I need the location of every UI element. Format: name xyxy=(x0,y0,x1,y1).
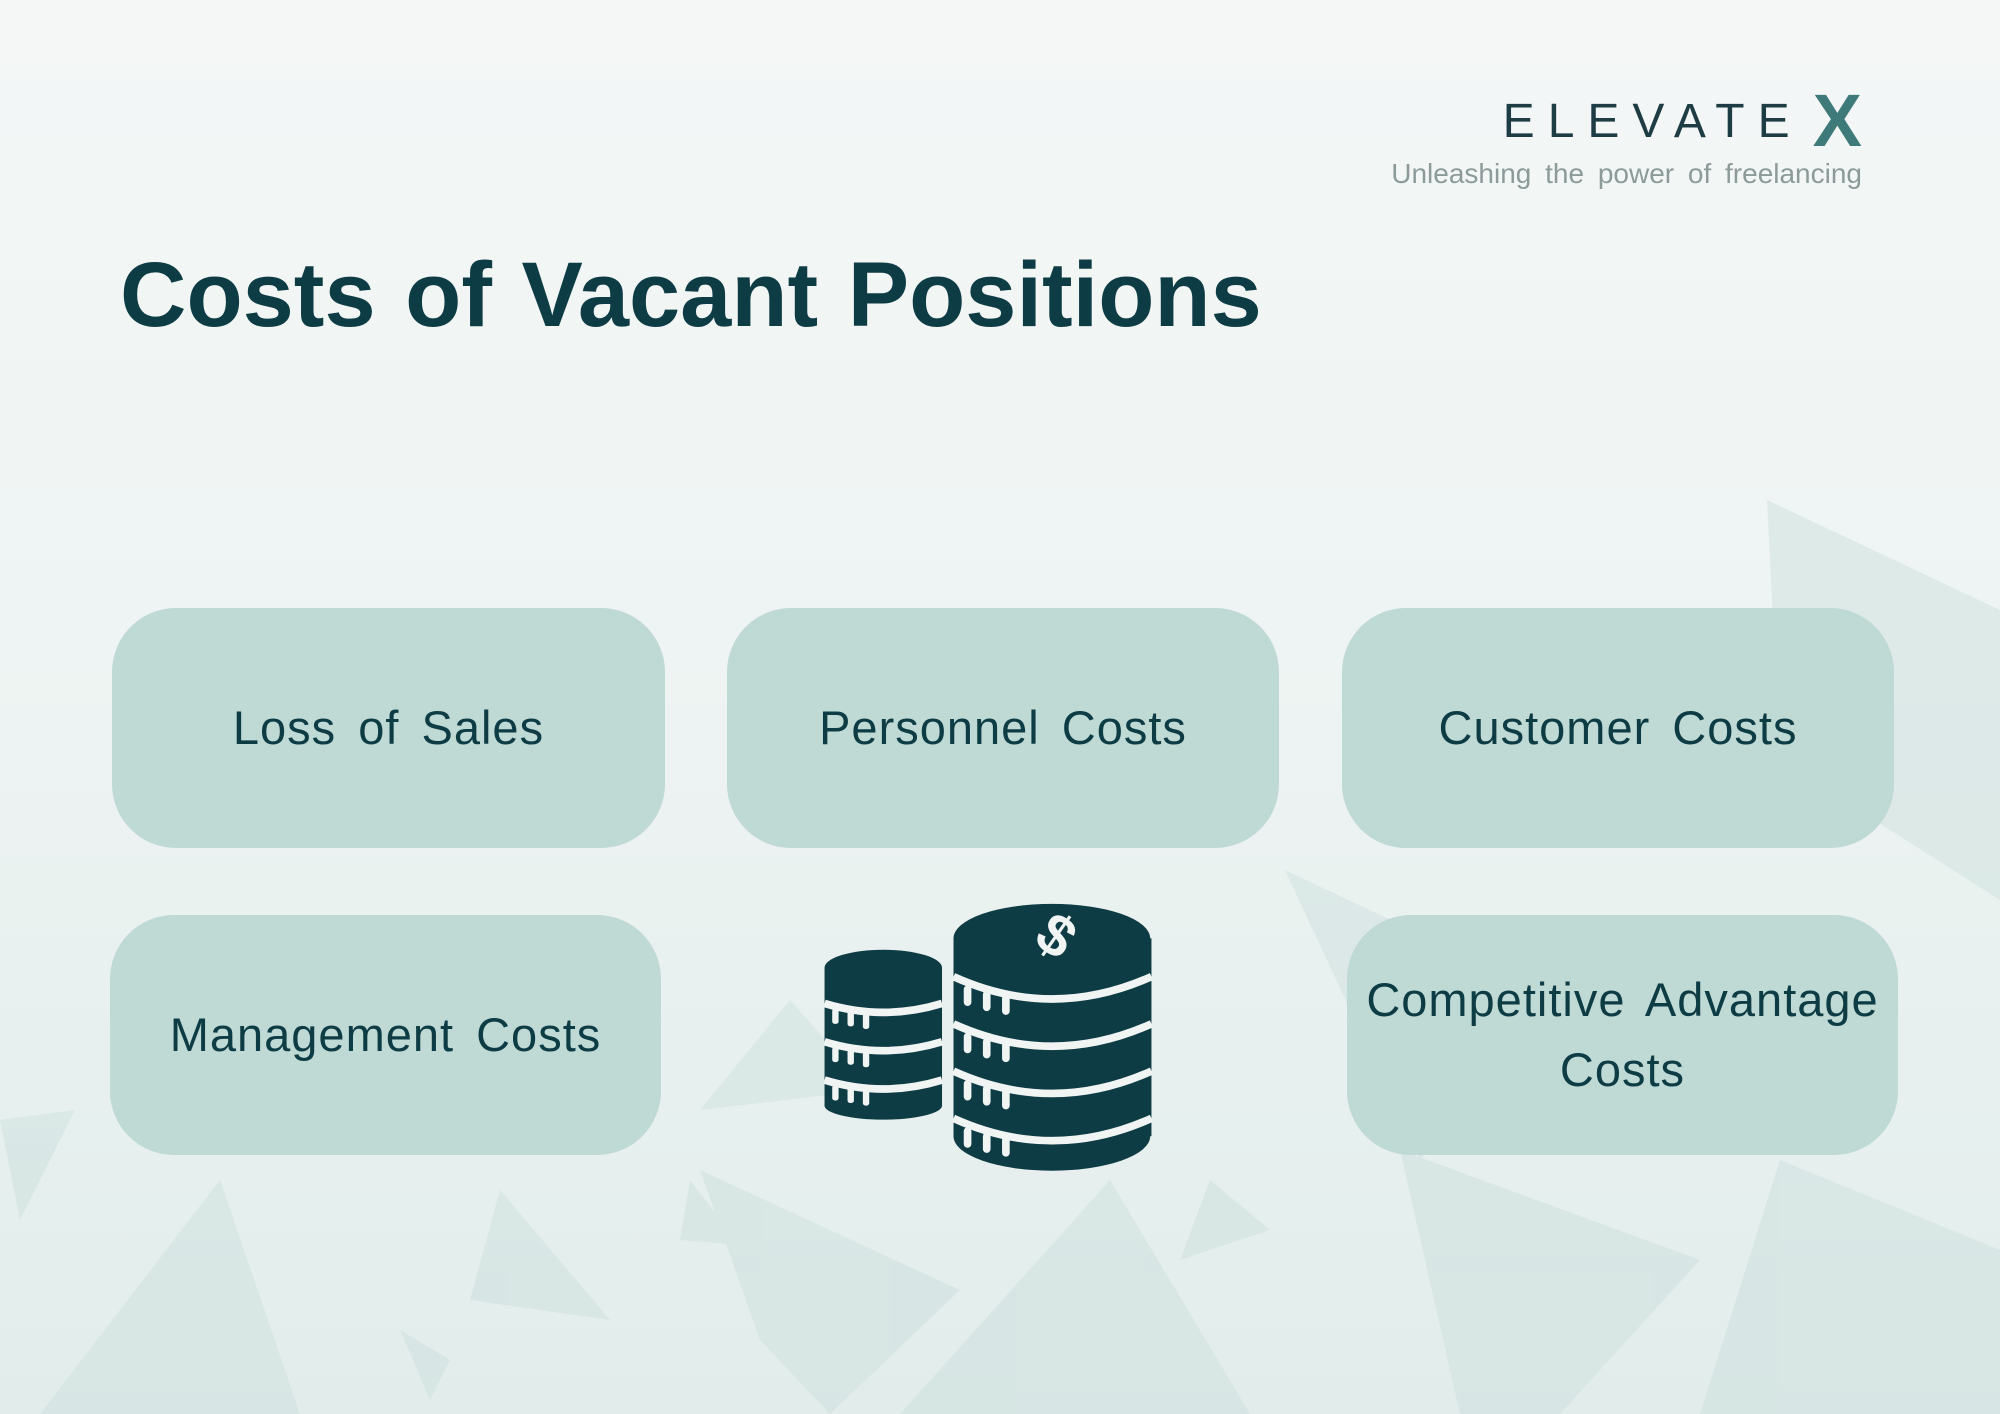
tagline: Unleashing the power of freelancing xyxy=(1391,158,1862,189)
icon: coin stacks xyxy=(824,900,1153,1171)
icon: coin stacks: $ xyxy=(1024,900,1088,972)
logo wordmark: ELEVATE xyxy=(1503,94,1803,148)
box: Personnel Costs: Personnel Costs xyxy=(819,701,1187,754)
box: Personnel Costs xyxy=(727,608,1279,848)
logo xyxy=(1391,79,1862,189)
box: Customer Costs: Customer Costs xyxy=(1439,701,1797,754)
box: Competitive Advantage Costs xyxy=(1347,915,1898,1155)
logo wordmark: X xyxy=(1813,79,1862,162)
box: Customer Costs xyxy=(1342,608,1894,848)
logo wordmark xyxy=(1503,79,1862,162)
box: Competitive Advantage Costs: Costs xyxy=(1560,1043,1685,1096)
box: Competitive Advantage Costs: Competitive Advantage xyxy=(1366,973,1879,1026)
box: Loss of Sales xyxy=(112,608,665,848)
box: Management Costs xyxy=(110,915,661,1155)
box: Loss of Sales: Loss of Sales xyxy=(233,701,544,754)
title: Costs of Vacant Positions xyxy=(120,244,1262,346)
box: Management Costs: Management Costs xyxy=(170,1008,601,1061)
